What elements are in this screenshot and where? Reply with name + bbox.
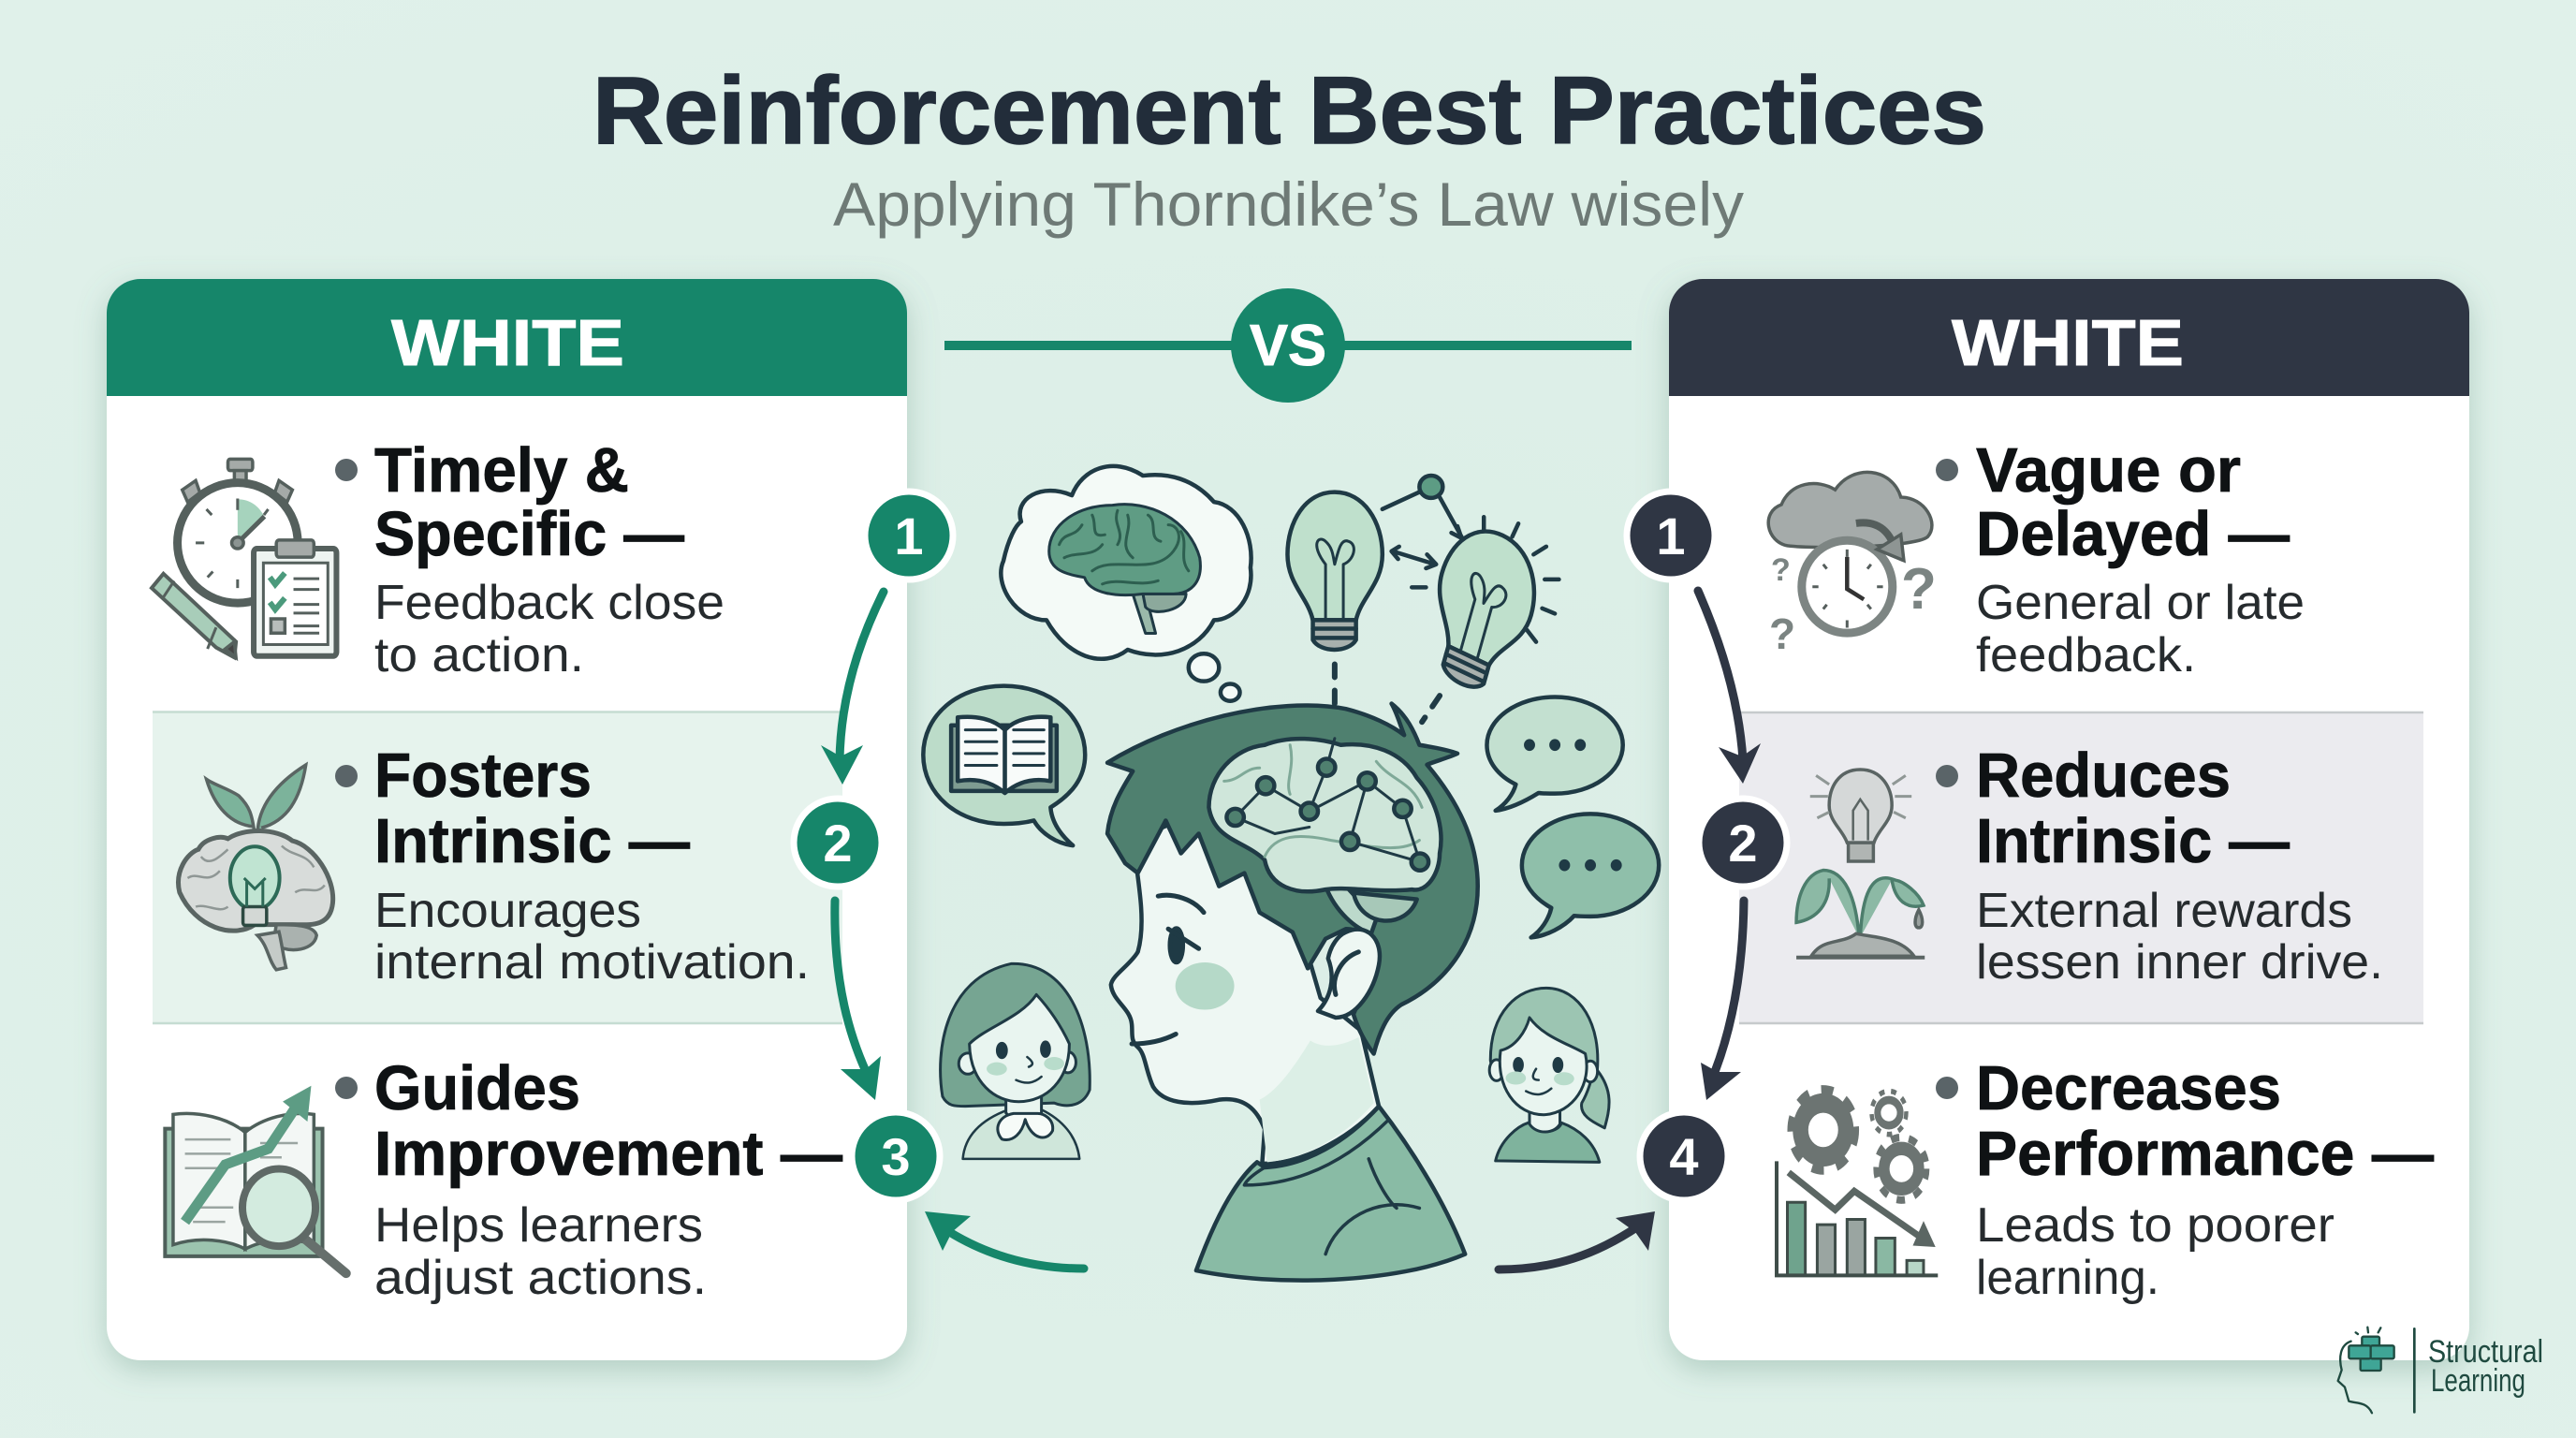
right row 3: decreases performance: Leads to poorer: [1976, 1198, 2334, 1253]
number badge: right 2: 2: [1728, 814, 1758, 873]
thought cloud with brain: [1001, 466, 1251, 701]
panel: left: [107, 279, 907, 1360]
right row 1: vague or delayed: Delayed —: [1976, 499, 2290, 569]
left row 3: guides improvement: Improvement —: [374, 1119, 842, 1189]
central illustration: boy thinking: [923, 466, 1659, 1281]
bullet: [1936, 459, 1958, 481]
right row 3: decreases performance: learning.: [1976, 1251, 2159, 1305]
number badge: right 4: 4: [1669, 1127, 1699, 1186]
left row 1: timely and specific: Specific —: [374, 499, 684, 569]
light bulb 1: [1287, 492, 1383, 650]
number badge: right 4: [1640, 1112, 1728, 1200]
right row 3: decreases performance: [1777, 1053, 2434, 1305]
title: Reinforcement Best Practices: [593, 57, 1986, 164]
bullet: [335, 1077, 358, 1099]
number badge: left 2: 2: [823, 814, 853, 873]
boy: hair: [1107, 704, 1478, 1054]
arrow: centre to left 3: [925, 1211, 1084, 1269]
number badge: left 2: [794, 799, 882, 887]
right row 3: decreases performance: Decreases: [1976, 1053, 2281, 1123]
question marks: ?: [1771, 552, 1791, 588]
bullet: [335, 765, 358, 787]
bullet: [335, 459, 358, 481]
boy: ear: [1318, 930, 1380, 1018]
icon: brain with sprout and bulb: [179, 765, 333, 970]
left row 2: fosters intrinsic: [179, 741, 810, 990]
left row 2: fosters intrinsic: internal motivation.: [374, 935, 810, 990]
right row 2: reduces intrinsic: External rewards: [1976, 884, 2352, 938]
subtitle: Applying Thorndike’s Law wisely: [833, 169, 1744, 239]
left row 1: timely and specific: Timely &: [374, 435, 629, 506]
icon: cloud, clock and question marks: [1768, 472, 1932, 633]
icon: stopwatch and clipboard: [152, 459, 336, 657]
bullet: [1936, 1077, 1958, 1099]
left row 3: guides improvement: Guides: [374, 1053, 580, 1123]
right row 2: reduces intrinsic: Reduces: [1976, 741, 2231, 811]
panel: right: [1669, 279, 2469, 1360]
right row 2: reduces intrinsic: lessen inner drive.: [1976, 935, 2383, 990]
question marks: ?: [1901, 557, 1937, 622]
left row 2: fosters intrinsic: Fosters: [374, 741, 592, 811]
arrow: centre to right 4: [1499, 1211, 1655, 1269]
logo: Structural Learning: Learning: [2431, 1363, 2525, 1399]
arrow: right 2 to 4: [1701, 901, 1744, 1100]
left row 1: timely and specific: [152, 435, 724, 682]
left row 2: fosters intrinsic: Intrinsic —: [374, 806, 690, 876]
right row 1: vague or delayed: General or late: [1976, 576, 2305, 630]
left row 1: timely and specific: to action.: [374, 628, 584, 682]
girl left: [941, 963, 1090, 1159]
highlighted row background: left: [153, 712, 842, 1023]
boy: face features: [1132, 895, 1419, 1255]
number badge: right 2: [1699, 799, 1787, 887]
right row 1: vague or delayed: [1768, 435, 2305, 682]
left row 3: guides improvement: [165, 1053, 842, 1305]
VS divider: VS: [1250, 314, 1326, 378]
number badge: right 1: 1: [1656, 506, 1686, 565]
speech bubble: book: [923, 686, 1085, 845]
right panel header: [1669, 279, 2469, 396]
right panel header: WHITE: [1952, 306, 2184, 379]
speech bubble: dots top: [1486, 697, 1623, 811]
number badge: left 1: 1: [894, 506, 924, 565]
left panel header: [107, 279, 907, 396]
left row 1: timely and specific: Feedback close: [374, 576, 724, 630]
VS divider: [944, 288, 1632, 403]
left row 3: guides improvement: adjust actions.: [374, 1251, 707, 1305]
boy: neck shadow: [1260, 1037, 1374, 1162]
right row 1: vague or delayed: Vague or: [1976, 435, 2241, 506]
right row 2: reduces intrinsic: [1796, 741, 2383, 990]
bulb connections and rays: [1335, 476, 1559, 726]
logo: Structural Learning: Structural: [2428, 1334, 2543, 1370]
arrow: right 1 to 2: [1698, 591, 1761, 784]
icon: gears and falling bar chart: [1777, 1091, 1938, 1275]
right row 3: decreases performance: Performance —: [1976, 1119, 2434, 1189]
number badge: left 3: 3: [881, 1127, 911, 1186]
logo: Structural Learning: [2338, 1328, 2543, 1413]
bullet: [1936, 765, 1958, 787]
right row 1: vague or delayed: feedback.: [1976, 628, 2196, 682]
left row 2: fosters intrinsic: Encourages: [374, 884, 641, 938]
girl right: [1489, 988, 1609, 1162]
highlighted row background: right: [1739, 712, 2423, 1023]
boy: shirt: [1196, 1107, 1465, 1281]
number badge: left 3: [852, 1112, 940, 1200]
left row 3: guides improvement: Helps learners: [374, 1198, 703, 1253]
arrow: left 2 to 3: [835, 901, 881, 1100]
number badge: right 1: [1627, 492, 1715, 580]
boy: brain with neural network: [1208, 739, 1441, 933]
light bulb 2: [1417, 515, 1547, 705]
left panel header: WHITE: [391, 306, 624, 379]
question marks: ?: [1769, 609, 1795, 658]
question marks: [1769, 552, 1937, 658]
icon: dim bulb and wilting plant: [1796, 770, 1925, 958]
arrow: left 1 to 2: [821, 592, 884, 785]
right row 2: reduces intrinsic: Intrinsic —: [1976, 806, 2290, 876]
speech bubble: dots bottom: [1522, 814, 1659, 937]
boy: skin: [1111, 814, 1379, 1164]
number badge: left 1: [865, 492, 953, 580]
icon: book with rising arrow and magnifier: [165, 1086, 346, 1273]
